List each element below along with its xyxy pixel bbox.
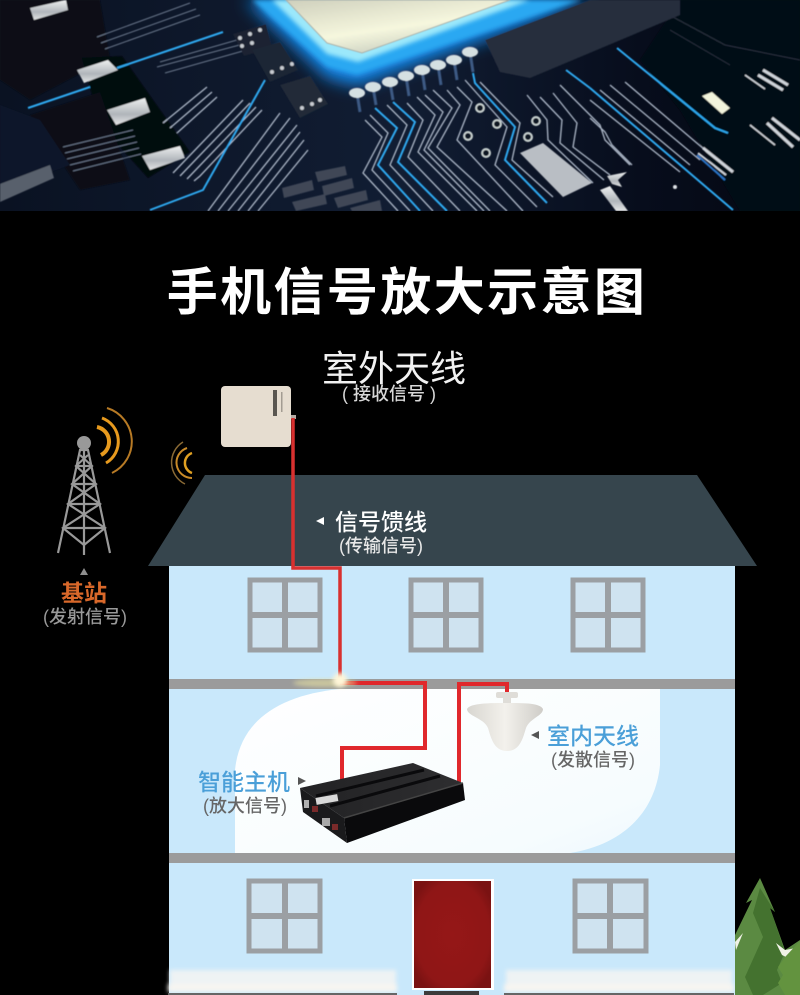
via rings — [464, 104, 540, 157]
metal pins — [349, 47, 478, 112]
red cable: amplifier to indoor antenna — [459, 684, 507, 782]
roof — [148, 475, 757, 566]
middle room white highlight — [235, 689, 660, 853]
label: feeder cable — [316, 509, 427, 556]
floor bands — [169, 679, 735, 863]
silver components — [0, 0, 730, 211]
pine tree — [735, 878, 800, 995]
label: indoor antenna: (发散信号) — [551, 750, 635, 770]
label: outdoor antenna: ( 接收信号 ) — [342, 384, 436, 404]
label: amplifier host — [198, 769, 306, 816]
small dark chips left of pins — [233, 24, 328, 118]
fence base lines — [168, 993, 734, 995]
label: indoor antenna — [531, 723, 639, 770]
label: feeder cable: 信号馈线 — [335, 509, 427, 535]
label: feeder cable: (传输信号) — [339, 536, 423, 556]
dark component bands — [0, 0, 800, 211]
upper floor windows — [250, 580, 643, 650]
red feeder cable: outdoor antenna to ceiling — [293, 418, 340, 678]
icon: signal amplifier host — [300, 763, 465, 843]
dark component right of chip — [485, 0, 680, 78]
white circuit traces — [163, 80, 705, 211]
title: 手机信号放大示意图 — [167, 264, 647, 321]
white fence — [168, 970, 734, 992]
label: base station: (发射信号) — [43, 607, 127, 627]
icon: outdoor panel antenna — [221, 386, 296, 447]
small grey chips — [282, 166, 382, 211]
label: indoor antenna: 室内天线 — [547, 723, 639, 749]
label: outdoor antenna: 室外天线 — [322, 348, 466, 389]
icon: signal tower — [58, 436, 110, 555]
label: base station: 基站 — [61, 580, 107, 606]
icon: indoor ceiling antenna — [467, 692, 543, 751]
faint grey circuit traces — [63, 3, 800, 171]
ground floor windows — [249, 881, 646, 951]
door step — [424, 991, 479, 995]
label: amplifier host: 智能主机 — [198, 769, 290, 795]
processor chip with blue glow — [245, 0, 595, 86]
icon: antenna signal waves — [172, 442, 192, 484]
blue circuit traces — [28, 32, 733, 211]
icon: tower signal waves — [97, 408, 132, 473]
label: amplifier host: (放大信号) — [203, 796, 287, 816]
header image: glowing circuit board — [0, 0, 800, 211]
right side silver strips — [673, 70, 800, 189]
ceiling glow spark — [293, 673, 357, 687]
label: base station — [43, 568, 127, 627]
red cable: ceiling to amplifier — [340, 683, 425, 782]
house wall — [169, 566, 735, 995]
red door — [412, 879, 494, 990]
